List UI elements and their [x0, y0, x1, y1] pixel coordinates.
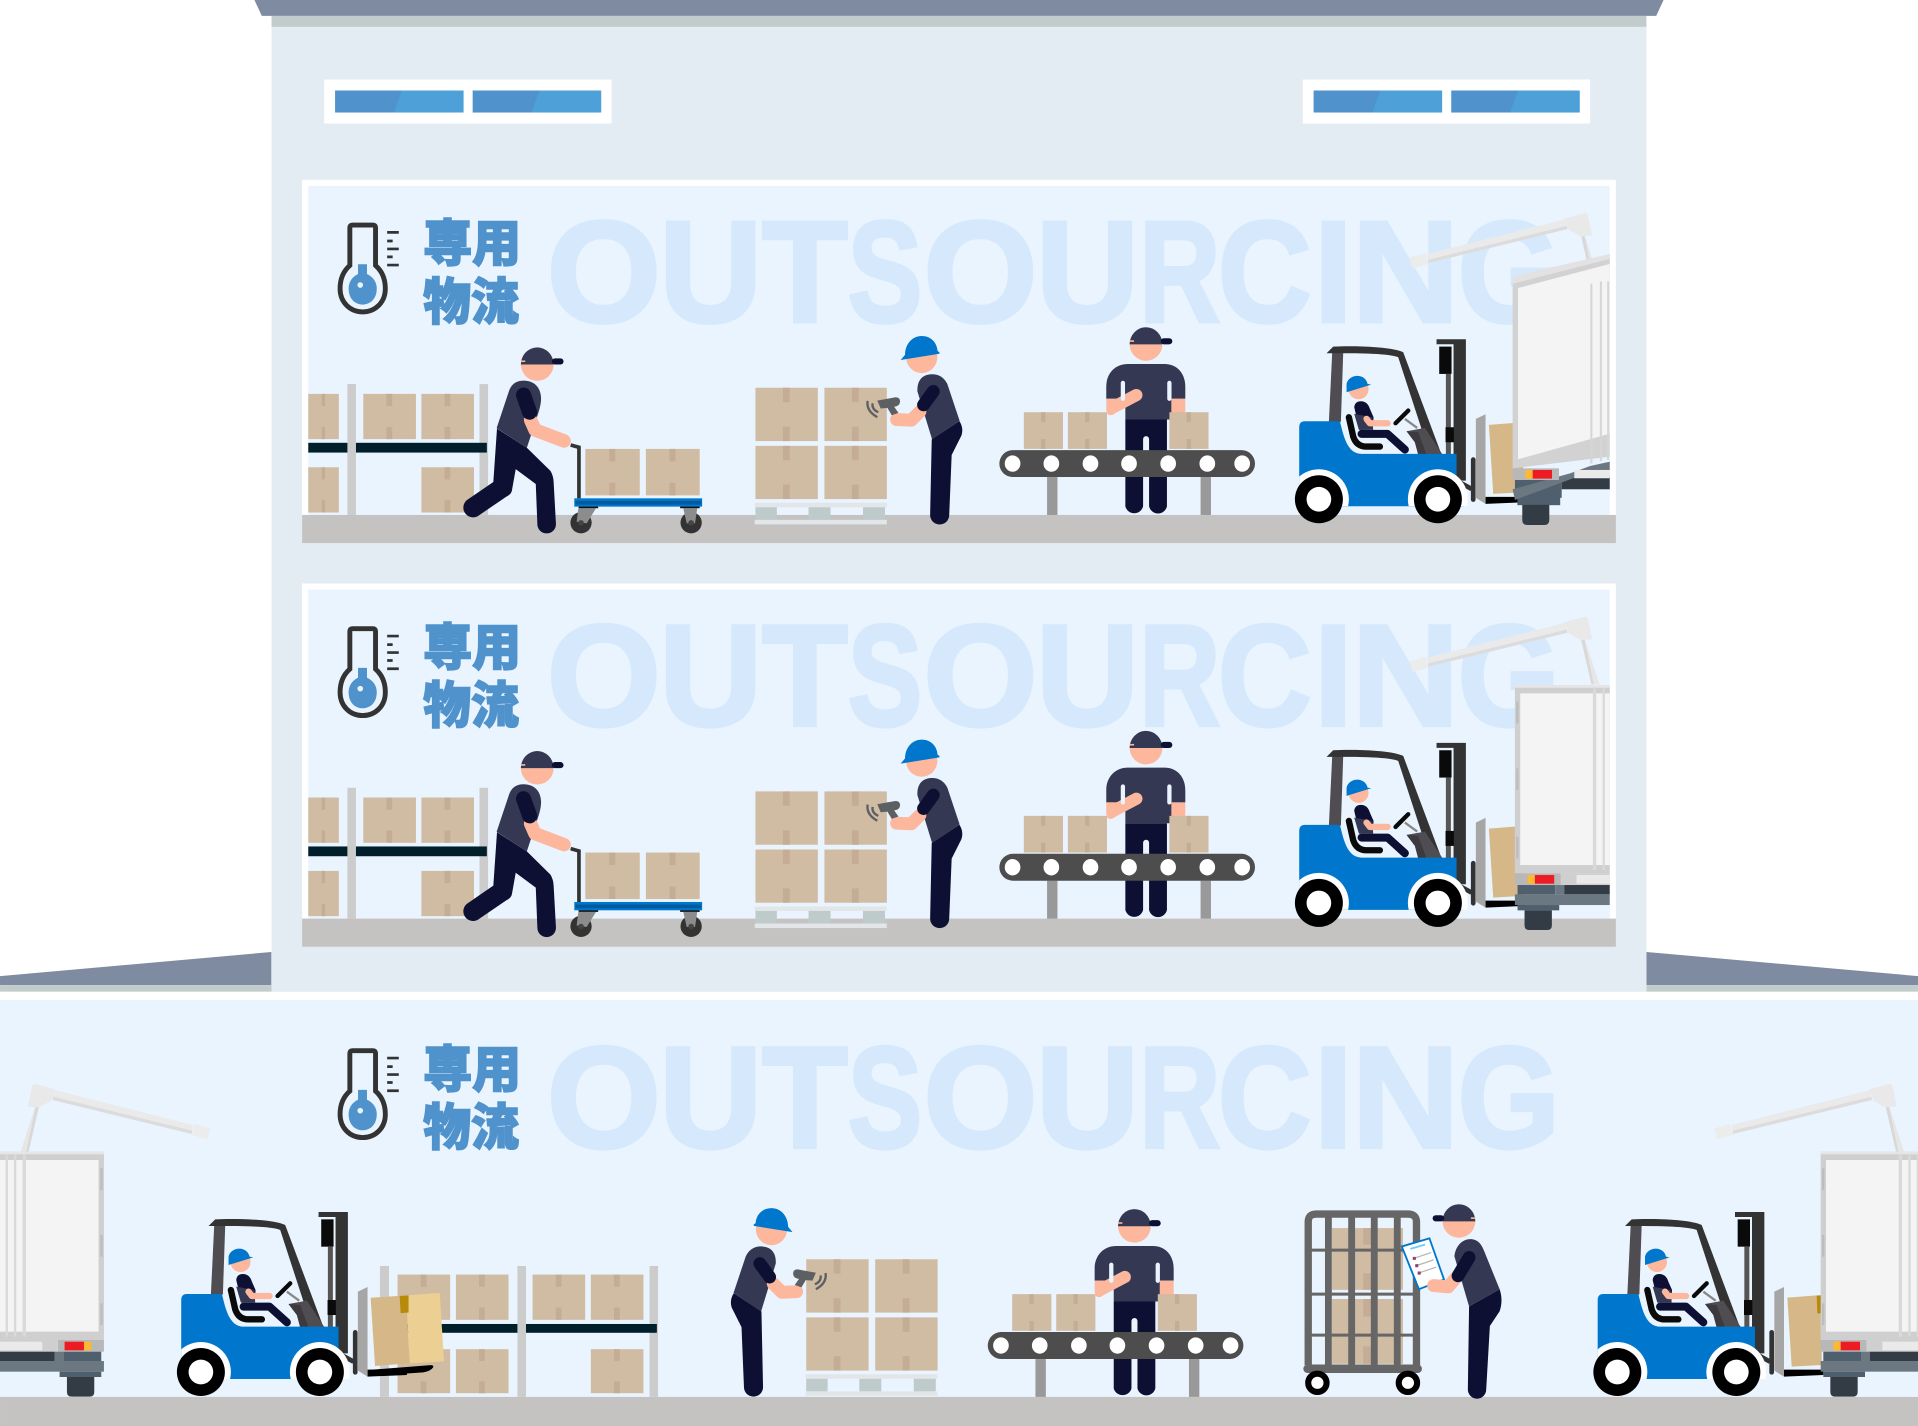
forklift [1289, 339, 1525, 523]
panel: upper floor [302, 180, 1616, 543]
watermark text: S [848, 594, 922, 756]
worker with clipboard [1402, 1204, 1501, 1399]
icon: thermometer [340, 225, 399, 312]
watermark text: I [1314, 191, 1353, 353]
left side roof [0, 952, 271, 985]
right truck with crane [1714, 1084, 1918, 1397]
main roof [254, 0, 1664, 16]
conveyor belt with boxes [988, 1294, 1243, 1397]
worker at conveyor [1106, 327, 1185, 513]
watermark text: T [762, 594, 848, 756]
crane arm [1409, 617, 1599, 684]
watermark text: O [923, 1016, 1038, 1178]
shelf with boxes [380, 1266, 658, 1397]
roll cage cart with boxes [1306, 1213, 1419, 1392]
watermark text: I [1314, 594, 1353, 756]
watermark text: G [1458, 1016, 1560, 1178]
watermark text: O [547, 1016, 661, 1178]
panel: middle floor [302, 583, 1622, 947]
worker at conveyor [1095, 1209, 1174, 1395]
watermark text: S [848, 191, 922, 353]
building facade [0, 0, 1918, 992]
conveyor belt with boxes [999, 412, 1255, 515]
watermark text: G [1458, 594, 1560, 756]
heading: 専用 [423, 1042, 521, 1098]
windows left [324, 80, 612, 124]
heading second line: 物流 [423, 1100, 519, 1156]
watermark text: I [1314, 1016, 1353, 1178]
left side roof fascia [0, 985, 272, 992]
watermark text: U [659, 594, 762, 756]
crane arm [1409, 213, 1599, 281]
watermark text: C [1218, 594, 1312, 756]
worker pushing cart [463, 751, 564, 937]
watermark text: S [848, 1016, 922, 1178]
heading: 専用 [423, 620, 521, 676]
building wall [272, 27, 1646, 992]
watermark text: C [1218, 191, 1312, 353]
left forklift carrying box [171, 1212, 407, 1396]
watermark text: O [547, 191, 661, 353]
watermark text: T [762, 191, 848, 353]
watermark text: R [1139, 594, 1220, 756]
pallet with boxes [755, 791, 887, 928]
shelf with boxes [308, 384, 488, 515]
watermark text: C [1218, 1016, 1312, 1178]
worker at conveyor [1106, 731, 1185, 917]
watermark text: R [1139, 1016, 1220, 1178]
watermark text: N [1352, 191, 1459, 353]
watermark text: O [923, 191, 1038, 353]
pallet with boxes [755, 388, 887, 524]
watermark text: O [547, 594, 661, 756]
pallet with boxes [805, 1259, 938, 1396]
main roof fascia [272, 16, 1646, 27]
watermark text: G [1458, 191, 1560, 353]
watermark text: T [762, 1016, 848, 1178]
icon: thermometer [340, 629, 399, 716]
worker pushing cart [463, 347, 564, 533]
watermark text: U [1036, 1016, 1139, 1178]
conveyor belt with boxes [999, 816, 1255, 919]
panel: ground floor [0, 992, 1918, 1426]
right side roof [1646, 952, 1918, 985]
watermark text: U [659, 191, 762, 353]
icon: thermometer [340, 1051, 399, 1138]
watermark text: U [1036, 191, 1139, 353]
fork tip and carried box [368, 1293, 444, 1376]
worker with scanner [867, 740, 962, 928]
watermark text: U [659, 1016, 762, 1178]
forklift [1289, 743, 1525, 927]
hand cart with boxes [570, 445, 702, 533]
heading second line: 物流 [423, 274, 519, 330]
hand cart with boxes [570, 849, 702, 937]
worker with scanner [731, 1208, 826, 1397]
shelf with boxes [308, 788, 488, 919]
windows right [1303, 80, 1590, 124]
watermark text: N [1352, 594, 1459, 756]
watermark text: R [1139, 191, 1220, 353]
truck [1514, 685, 1610, 930]
heading second line: 物流 [423, 678, 519, 734]
left truck with crane [0, 1084, 211, 1397]
worker with scanner [867, 336, 962, 525]
watermark text: U [1036, 594, 1139, 756]
watermark text: O [923, 594, 1038, 756]
right forklift [1587, 1212, 1823, 1396]
right side roof fascia [1646, 985, 1918, 992]
truck in perspective [1513, 253, 1613, 525]
heading: 専用 [423, 216, 521, 272]
watermark text: N [1352, 1016, 1459, 1178]
